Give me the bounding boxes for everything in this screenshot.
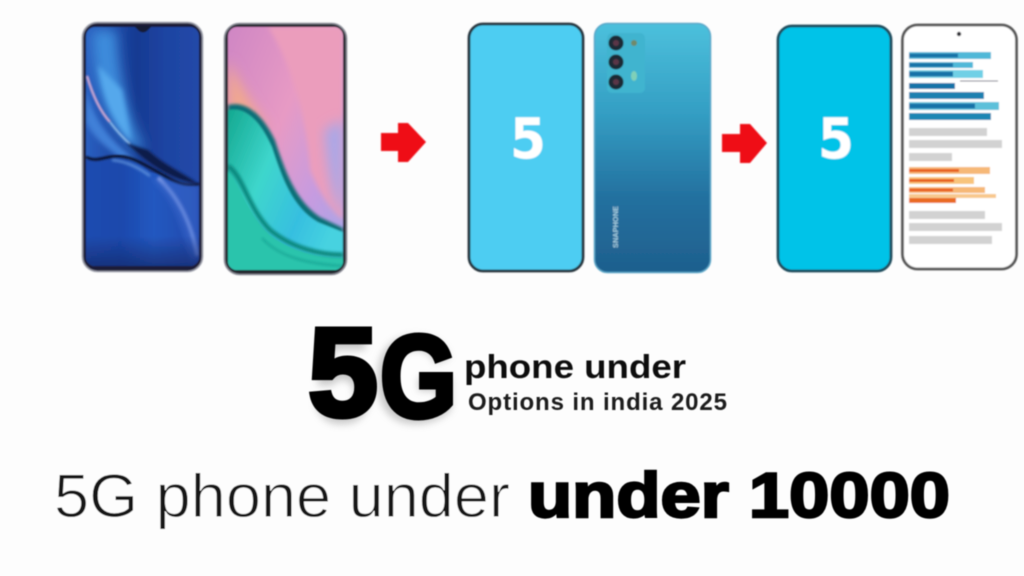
orange bars bbox=[909, 167, 996, 203]
grey bars bbox=[909, 128, 1002, 161]
heading: 5G logo: 5G bbox=[312, 312, 458, 450]
phone 6: chart list screen bbox=[902, 25, 1016, 269]
bottom headline: bold part: under 10000 bbox=[528, 461, 950, 531]
subheading: options in India 2025: Options in india 2025 bbox=[468, 389, 727, 416]
blue bars bbox=[909, 52, 999, 120]
back label: SNAPHONE bbox=[611, 206, 620, 248]
phone 5: cyan screen front bbox=[778, 26, 891, 271]
phone 1: blue wallpaper front bbox=[82, 22, 202, 272]
digit 5: 5 bbox=[510, 107, 546, 172]
phone 3: blue screen front bbox=[469, 24, 583, 271]
heading: 5G logo: 5 bbox=[308, 302, 378, 443]
digit 5: 5 bbox=[818, 107, 854, 172]
lower grey bars bbox=[909, 211, 1002, 244]
heading: 5G logo: G bbox=[380, 311, 457, 442]
bottom headline: light part: 5G phone under bbox=[54, 462, 510, 530]
camera island bbox=[607, 33, 645, 93]
arrow 1 bbox=[381, 123, 426, 162]
phone 4: teal back bbox=[594, 24, 710, 272]
heading: phone under: phone under bbox=[464, 348, 686, 385]
phone 2: pink and teal wallpaper front bbox=[224, 24, 346, 274]
arrow 2 bbox=[722, 124, 767, 163]
